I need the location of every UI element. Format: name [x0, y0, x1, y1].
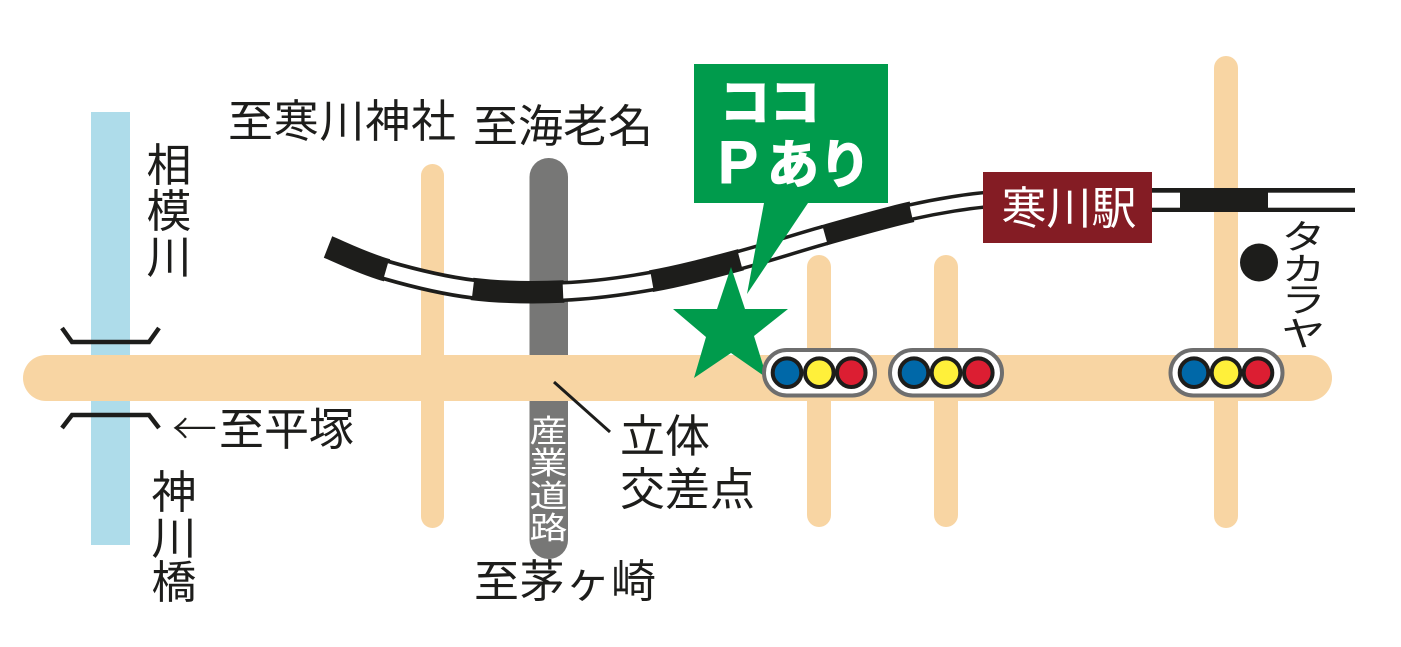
label: Takaraya: タ [1282, 219, 1325, 257]
traffic light 2 [890, 350, 1002, 396]
label: Sagami River: 川 [146, 232, 192, 283]
label: Takaraya: カ [1281, 252, 1326, 287]
traffic light 1 [764, 350, 875, 396]
label: to Samukawa Shrine: 至寒川神社 [228, 96, 456, 147]
cross street 3 [934, 255, 958, 527]
label: grade separated intersection: 交差点 [620, 464, 755, 515]
bridge over river [62, 328, 159, 428]
label: industrial road: 道 [529, 480, 568, 514]
traffic light 3 [1170, 350, 1282, 396]
cross street 4 [1214, 56, 1238, 528]
label: Kanagawa Bridge: 橋 [151, 557, 197, 608]
label: to Chigasaki: 至茅ヶ崎 [474, 556, 656, 607]
industrial road [530, 158, 568, 559]
label: Takaraya: ラ [1282, 282, 1325, 320]
label: Takaraya: ヤ [1282, 316, 1325, 354]
label: Kanagawa Bridge: 川 [151, 513, 197, 564]
icon: Takaraya marker [1240, 244, 1278, 282]
callout: parking here: P [718, 129, 758, 196]
label: industrial road: 業 [529, 446, 568, 481]
label: to Hiratsuka [172, 393, 354, 458]
label: to Hiratsuka: ← [172, 393, 217, 458]
label: Kanagawa Bridge: 神 [151, 467, 197, 518]
cross street 2 [807, 255, 831, 527]
station label [983, 172, 1152, 243]
railway line [328, 188, 1355, 292]
label: Sagami River: 相 [146, 140, 192, 191]
callout: parking here [694, 64, 888, 294]
label: grade separated intersection: 立体 [620, 411, 710, 462]
label: to Ebina: 至海老名 [473, 101, 653, 152]
label: Takaraya [1281, 219, 1326, 354]
main road [23, 355, 1332, 401]
label: industrial road: 路 [529, 511, 568, 546]
icon: star location [673, 267, 788, 378]
cross street 1 [421, 164, 444, 528]
station label: 寒川駅 [1001, 183, 1137, 234]
label: to Hiratsuka: 至平塚 [219, 404, 354, 455]
label: Sagami River: 模 [146, 186, 192, 237]
overpass leader line [554, 382, 610, 432]
river: Sagami [91, 112, 130, 545]
callout: parking here: ココ [720, 75, 820, 131]
label: industrial road: 産 [529, 414, 568, 449]
label: industrial road [529, 414, 568, 546]
callout: parking here: あり [767, 137, 871, 195]
